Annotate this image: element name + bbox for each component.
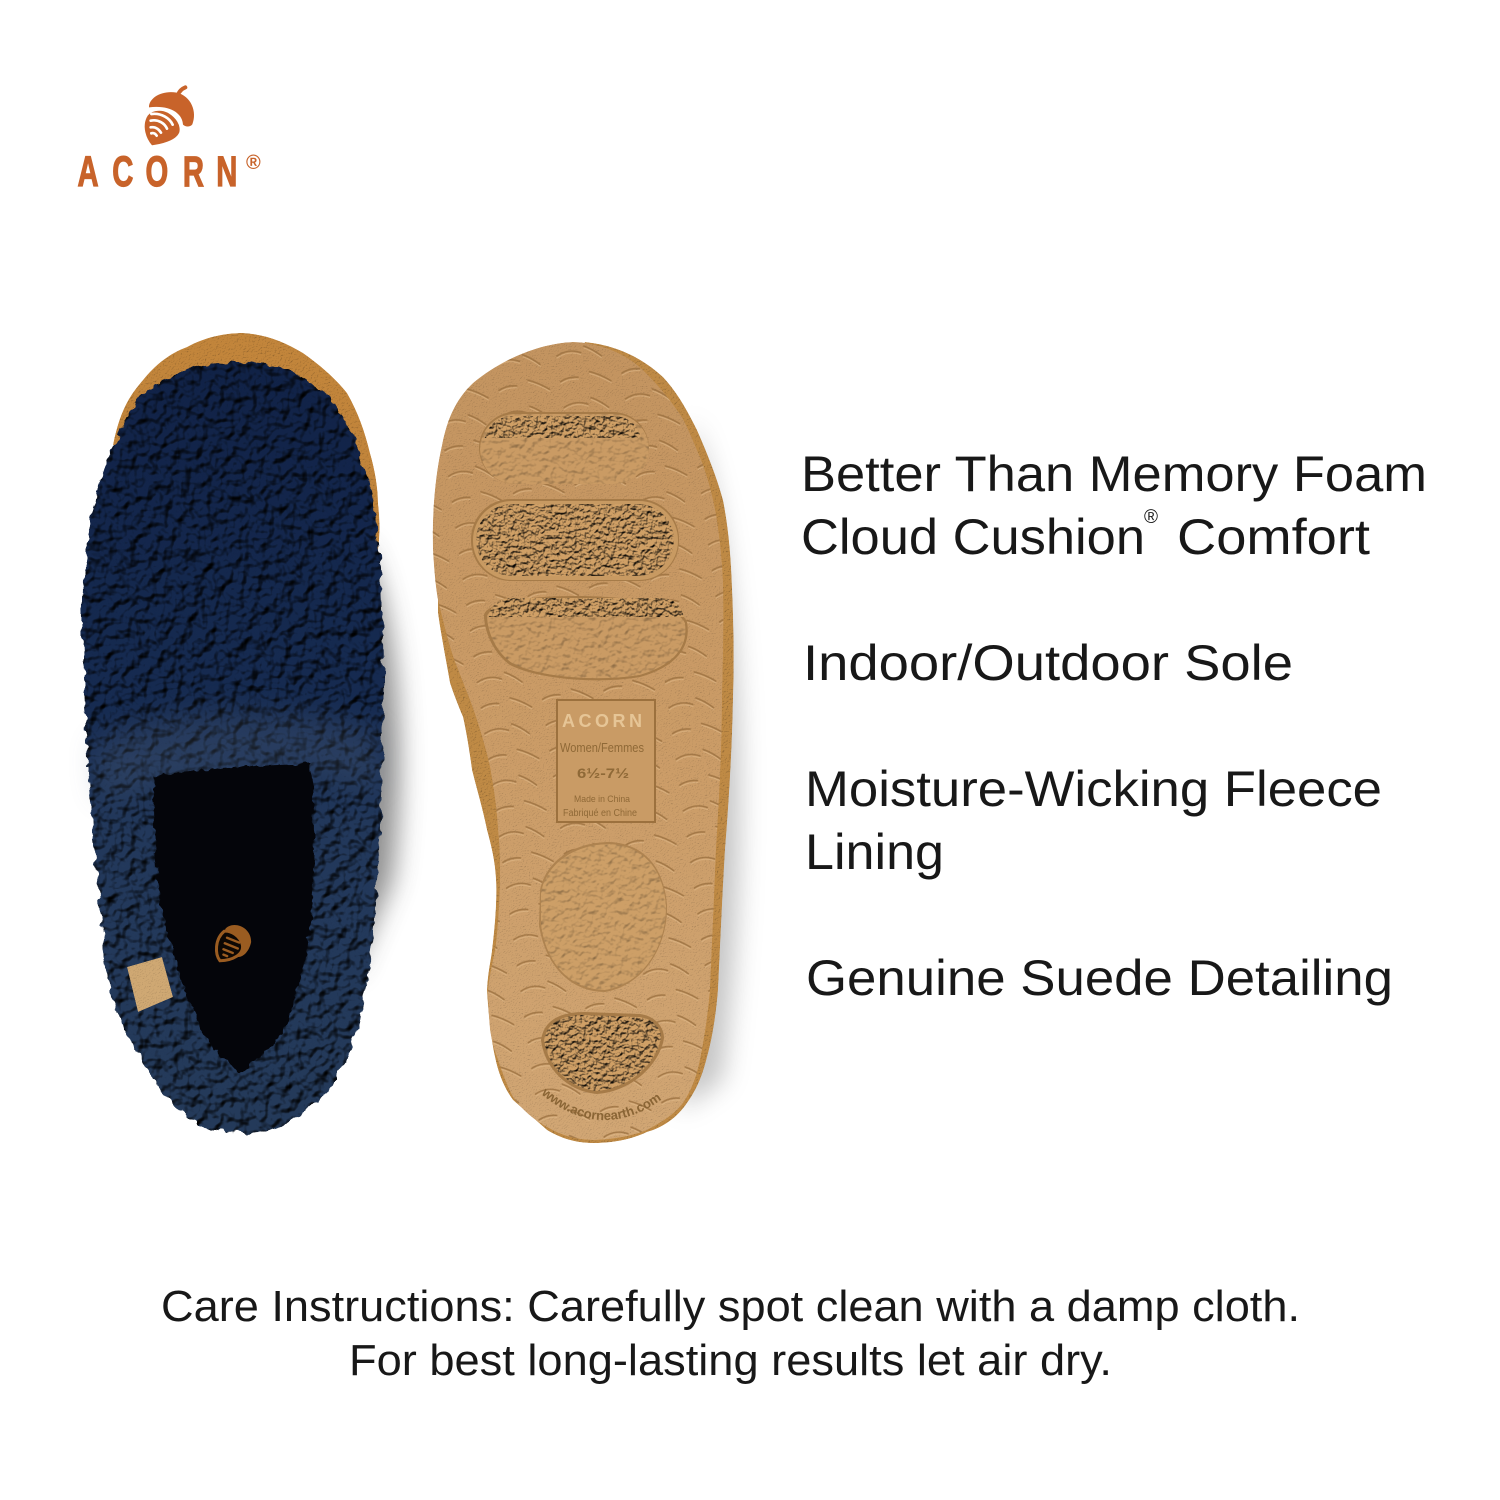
slipper sole view: [432, 342, 753, 1143]
embroidered acorn: [211, 920, 256, 969]
wordmark: ACORN: [78, 147, 237, 195]
website imprint: www.acornearth.com: [542, 1088, 661, 1120]
collar band highlight: [95, 711, 378, 800]
size label box: Fabriqué en Chine: [563, 808, 637, 819]
size label box: ACORN: [562, 711, 642, 731]
feature list: [801, 446, 1427, 1006]
slipper top view: [82, 333, 399, 1133]
feature: memory foam: Better Than Memory Foam: [801, 446, 1427, 502]
infographic canvas: [78, 85, 1424, 1384]
heel pad large: [539, 842, 667, 992]
care instructions: For best long-lasting results let air dry.: [349, 1336, 1112, 1385]
feature: sole: Indoor/Outdoor Sole: [803, 635, 1293, 691]
tread pattern: [430, 340, 730, 1150]
feature: memory foam: [801, 446, 1427, 565]
icon: acorn: [144, 87, 194, 146]
size label box: Made in China: [574, 794, 631, 805]
brand logo: [78, 87, 261, 195]
feature: fleece lining: Moisture-Wicking Fleece: [805, 761, 1382, 817]
care instructions: [161, 1282, 1300, 1385]
fleece upper: [82, 362, 384, 1133]
shoe shadow: [330, 540, 399, 980]
toe pad 3: [484, 596, 688, 680]
heel pad small: [541, 1012, 664, 1094]
opening lining: [154, 764, 314, 1073]
toe pad 1: [479, 412, 649, 484]
outsole: [433, 342, 723, 1140]
feature: suede: Genuine Suede Detailing: [806, 950, 1393, 1006]
feature: memory foam: Comfort: [1177, 509, 1370, 565]
registered mark: ®: [246, 152, 261, 174]
suede toe: [113, 333, 380, 550]
size label box: Women/Femmes: [560, 741, 644, 755]
care instructions: Care Instructions: Carefully spot clean with a damp cloth.: [161, 1282, 1300, 1331]
feature: fleece lining: Lining: [805, 824, 944, 880]
size label box: [557, 700, 655, 822]
feature: memory foam: Cloud Cushion: [801, 509, 1145, 565]
feature: fleece lining: [805, 761, 1382, 880]
suede edge: [438, 342, 734, 1143]
sole shadow: [680, 420, 740, 1110]
feature: memory foam: ®: [1144, 507, 1158, 528]
size label box: 6½-7½: [577, 766, 629, 781]
fabric tag: [127, 957, 173, 1012]
toe pad 2: [471, 499, 679, 581]
